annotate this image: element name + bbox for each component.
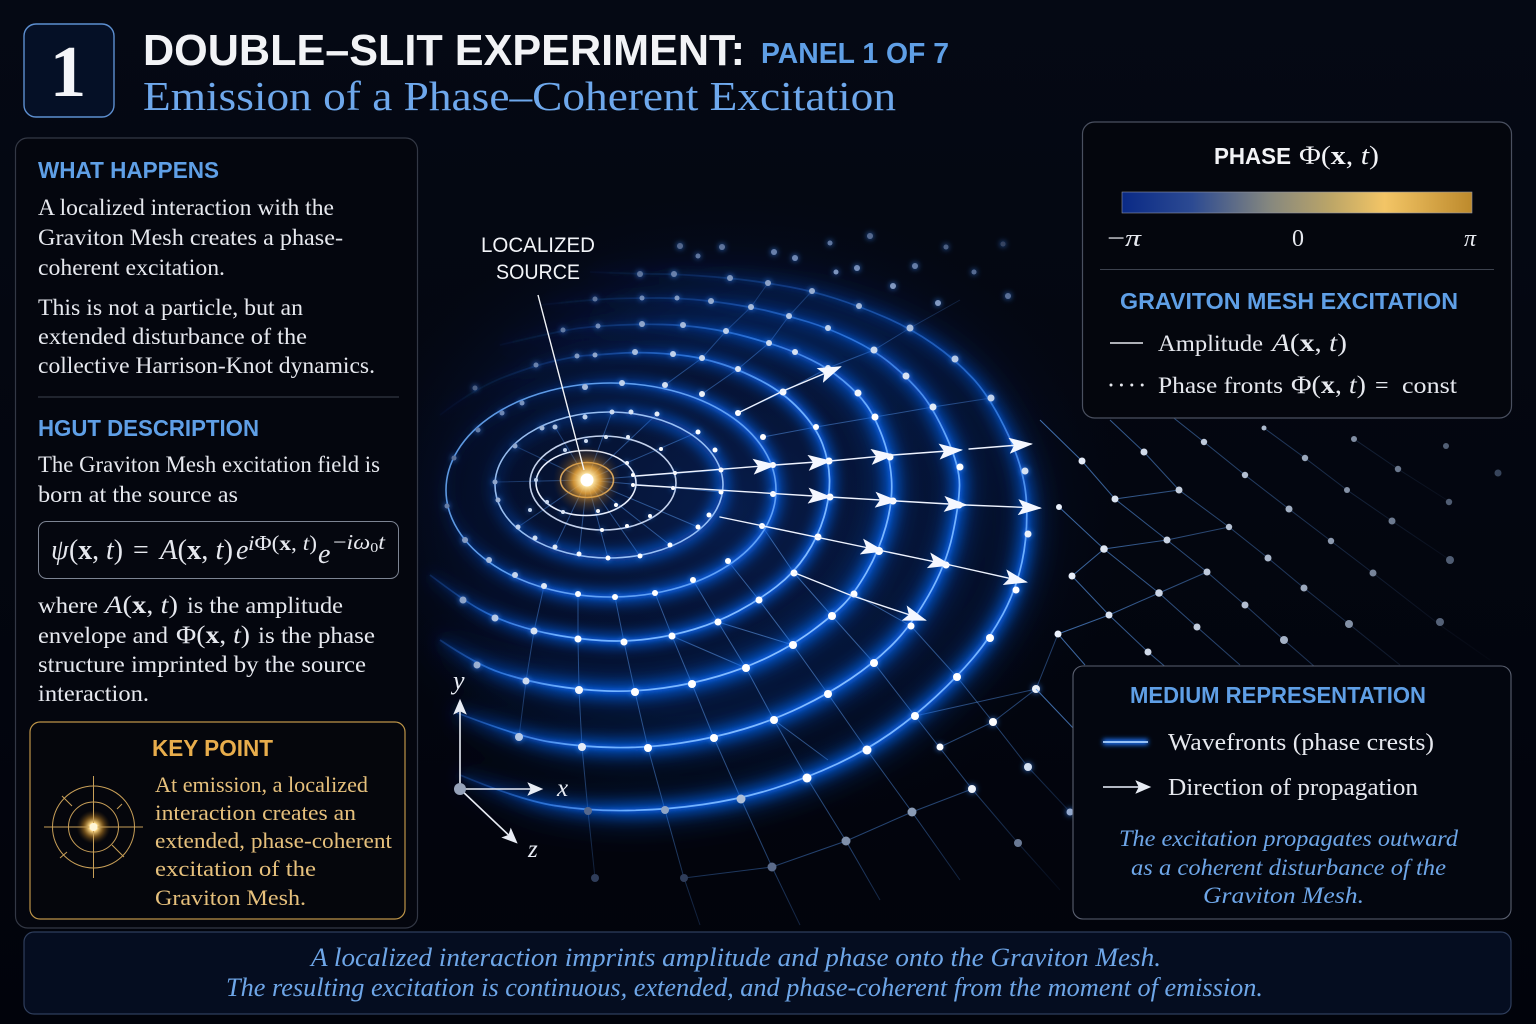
source callout: LOCALIZED (481, 234, 595, 257)
heading: hgut description: HGUT DESCRIPTION (38, 415, 259, 441)
italic note: The excitation propagates outward (1119, 826, 1459, 851)
text: hgut intro (38, 452, 380, 507)
formula box: 0 (370, 541, 378, 556)
wave field illustration (330, 190, 1502, 925)
wavefront rings (430, 272, 1027, 811)
text: formula explanation: Φ(x, t) (176, 622, 250, 649)
panel: left explanation (16, 138, 418, 928)
glowing source (553, 446, 621, 514)
formula box: iΦ(x, t) (248, 531, 317, 555)
phase colour bar (1122, 192, 1472, 213)
bottom summary banner: A localized interaction imprints amplitude and phase onto the Graviton Mesh. (309, 943, 1161, 972)
title: PANEL 1 OF 7 (761, 38, 949, 70)
legend: phase fronts: Φ(x, t) (1291, 372, 1366, 399)
formula box: (x, t) (69, 535, 123, 566)
glow around wavefronts (430, 272, 1027, 811)
phase scale labels: −π (1107, 226, 1142, 252)
panel number badge: 1 (50, 31, 86, 112)
text: formula explanation: envelope and (38, 623, 169, 648)
key point text: interaction creates an (155, 800, 356, 825)
text: what happens body: Graviton Mesh creates a phase- (38, 225, 343, 250)
formula box: A(x, t) (158, 535, 233, 566)
coordinate axes (450, 666, 568, 863)
key point text: excitation of the (155, 856, 316, 881)
propagation arrows (636, 367, 1040, 620)
legend: amplitude: A(x, t) (1270, 330, 1347, 357)
fading lower dots (584, 794, 1022, 882)
text: what happens body (38, 195, 375, 378)
mesh lines (495, 283, 1070, 925)
italic note: as a coherent disturbance of the (1131, 855, 1446, 880)
source callout: SOURCE (496, 261, 580, 284)
text: what happens body: coherent excitation. (38, 255, 225, 280)
text: formula explanation: is the amplitude (187, 593, 343, 618)
coordinate axes: y (450, 666, 465, 695)
formula box: ψ (51, 535, 69, 566)
text: formula explanation: interaction. (38, 681, 149, 706)
panel: medium representation (1073, 666, 1511, 919)
phase scale labels: π (1464, 226, 1477, 252)
phase scale labels: 0 (1292, 226, 1304, 252)
formula box: t (378, 530, 386, 554)
key point text: extended, phase-coherent (155, 828, 392, 853)
coordinate axes: x (556, 775, 568, 802)
legend: amplitude: Amplitude (1158, 331, 1263, 356)
formula box: = (133, 535, 149, 566)
key point heading: KEY POINT (152, 735, 273, 761)
phase scale labels (1107, 226, 1477, 252)
italic note (1119, 826, 1459, 908)
source callout (481, 234, 595, 470)
heading: medium representation: MEDIUM REPRESENTATION (1130, 682, 1426, 708)
legend: phase fronts (1111, 372, 1458, 399)
phase heading: Φ(x, t) (1299, 141, 1379, 170)
text: what happens body: A localized interaction with the (38, 195, 334, 220)
legend: wavefronts: Wavefronts (phase crests) (1168, 730, 1434, 756)
text: what happens body: extended disturbance of the (38, 324, 307, 349)
text: hgut intro: born at the source as (38, 482, 238, 507)
legend: phase fronts: = (1375, 373, 1389, 399)
callout: key point (30, 722, 405, 919)
key point icon (44, 776, 143, 878)
inner rings (446, 383, 776, 597)
key point text (155, 772, 392, 910)
formula box (38, 522, 398, 578)
phase-front dots (444, 233, 1074, 816)
title (143, 26, 949, 119)
phase heading: PHASE (1214, 143, 1291, 169)
legend: direction: Direction of propagation (1168, 775, 1418, 801)
text: formula explanation: where (38, 593, 98, 618)
text: hgut intro: The Graviton Mesh excitation field is (38, 452, 380, 477)
heading: graviton mesh excitation: GRAVITON MESH EXCITATION (1120, 288, 1458, 314)
wide glow around outer wavefronts (440, 272, 1027, 811)
italic note: Graviton Mesh. (1203, 883, 1364, 908)
coordinate axes: z (527, 836, 538, 863)
bottom summary banner (24, 932, 1511, 1014)
formula box: −iω (333, 530, 367, 554)
text: what happens body: This is not a particle, but an (38, 295, 304, 320)
title: Emission of a Phase–Coherent Excitation (143, 73, 896, 119)
legend: phase fronts: const (1402, 373, 1458, 398)
key point text: Graviton Mesh. (155, 885, 306, 910)
text: what happens body: collective Harrison-Knot dynamics. (38, 353, 375, 378)
extended mesh lattice at right (1036, 415, 1502, 730)
legend: amplitude (1110, 330, 1347, 357)
heading: what happens: WHAT HAPPENS (38, 157, 219, 183)
panel number badge (24, 24, 114, 117)
text: formula explanation: A(x, t) (103, 592, 178, 619)
panel: phase legend (1082, 122, 1512, 418)
text: formula explanation (38, 592, 375, 706)
phase heading (1214, 141, 1379, 170)
formula box: e (318, 539, 330, 570)
formula box: e (236, 535, 248, 566)
bottom summary banner: The resulting excitation is continuous, extended, and phase-coherent from the moment of emission. (226, 973, 1263, 1002)
key point text: At emission, a localized (155, 772, 368, 797)
legend: phase fronts: Phase fronts (1158, 373, 1283, 398)
text: formula explanation: structure imprinted by the source (38, 652, 366, 677)
source ring (560, 462, 614, 498)
title: DOUBLE–SLIT EXPERIMENT: (143, 26, 745, 75)
text: formula explanation: is the phase (258, 623, 375, 648)
